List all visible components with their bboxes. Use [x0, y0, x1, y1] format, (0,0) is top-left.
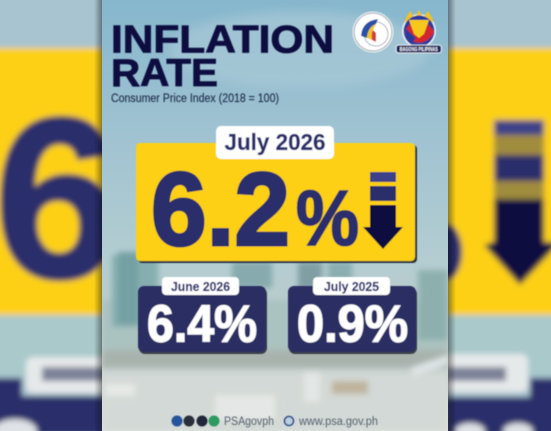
value 6.2%: 6.2 [151, 152, 290, 268]
date label [216, 126, 334, 159]
panel: card drop shadows [94, 0, 456, 431]
icon: Bagong Pilipinas logo: BAGONG PILIPINAS [400, 47, 438, 53]
value 6.2%: % [296, 174, 359, 262]
icon: down arrow [363, 172, 403, 249]
label: July 2025: July 2025 [324, 279, 379, 294]
handle: PSAgovph [224, 416, 274, 428]
icon: Bagong Pilipinas logo [396, 10, 442, 53]
value 6.2% [151, 152, 359, 268]
title: RATE [111, 52, 218, 95]
panel: blurred left background [0, 0, 121, 431]
icon: globe [284, 416, 294, 426]
website: www.psa.gov.ph [298, 416, 378, 428]
panel: June 2026 comparison [138, 277, 267, 354]
panel: July 2025 comparison [288, 277, 417, 354]
panel: central card background with city photo [102, 0, 448, 431]
title [111, 18, 334, 95]
subtitle: Consumer Price Index (2018 = 100) [111, 93, 279, 105]
panel: blurred right background [430, 0, 551, 431]
date label: July 2026 [224, 129, 326, 155]
icon: social media row [172, 416, 220, 426]
label: June 2026: June 2026 [171, 279, 230, 294]
panel: July 2026 headline [136, 126, 417, 268]
icon: PSA logo [352, 12, 394, 52]
title: INFLATION [111, 18, 334, 62]
value: 6.4%: 6.4% [147, 296, 257, 354]
value: 0.9%: 0.9% [297, 296, 408, 354]
yellow box with shadow [136, 143, 417, 263]
footer: social and website [172, 416, 378, 428]
